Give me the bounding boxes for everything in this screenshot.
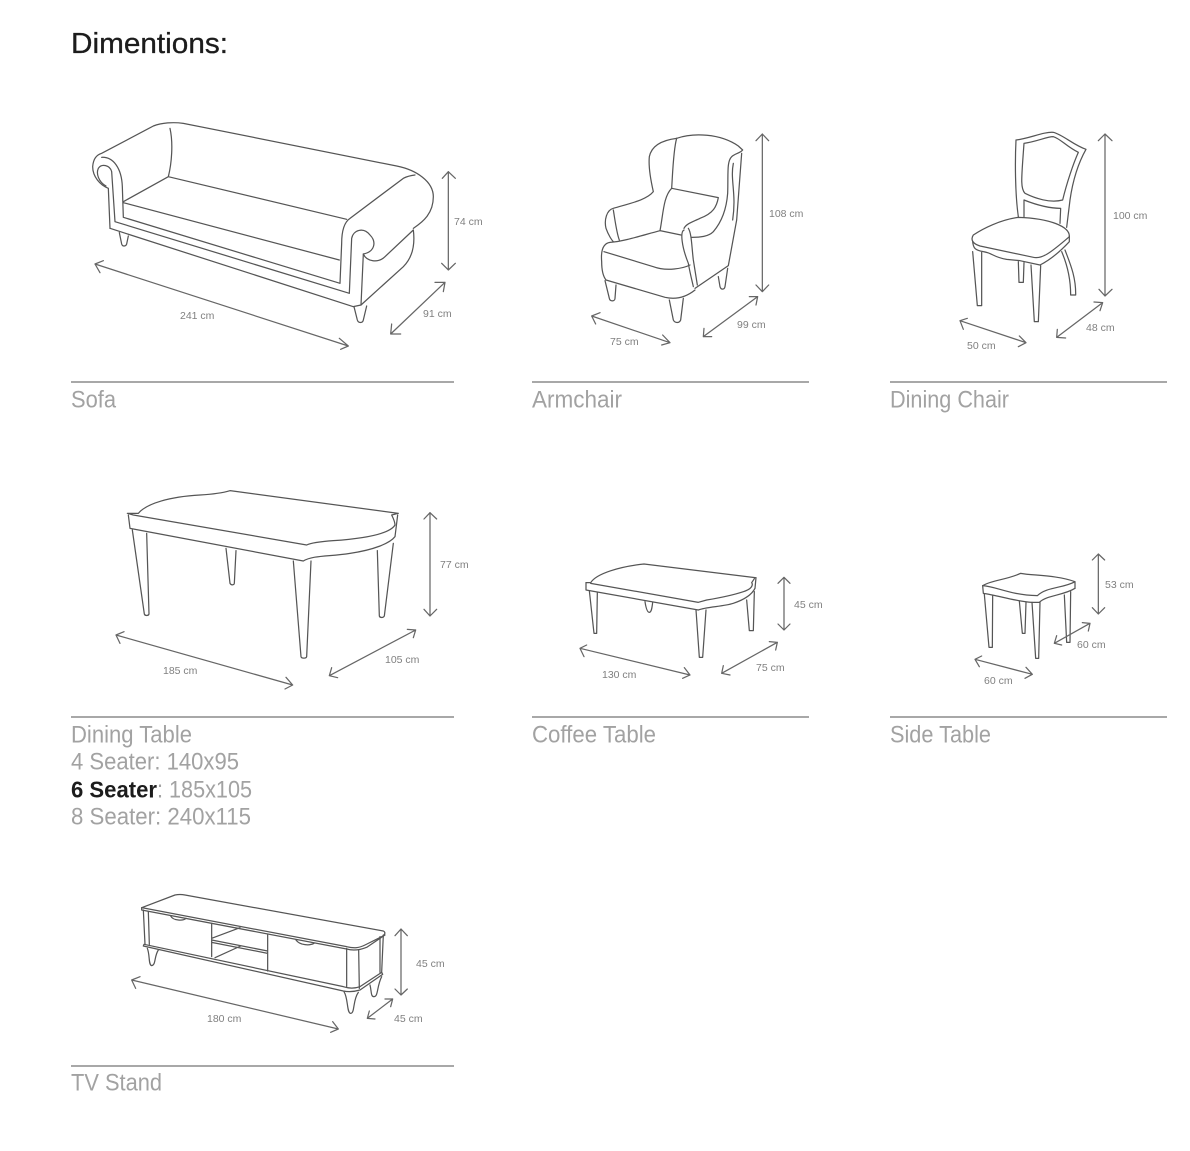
panel: sofa	[71, 123, 483, 413]
label: Dining Table sizes: Dining Table	[71, 722, 192, 748]
arrow: chair depth	[1057, 302, 1103, 338]
label: 99 cm: 99 cm	[737, 319, 766, 331]
icon: armchair drawing	[601, 135, 743, 322]
arrow: armchair width	[592, 313, 670, 345]
icon: tv stand drawing	[142, 894, 385, 1013]
label: Dining Table sizes: 8 Seater: 240x115	[71, 804, 251, 830]
arrow: table height	[424, 513, 437, 616]
arrow: sofa width	[95, 261, 348, 349]
panel: dining chair	[890, 132, 1167, 414]
label: Dining Table sizes: 6 Seater	[71, 776, 157, 802]
label: 45 cm: 45 cm	[416, 958, 445, 970]
arrow: coffee table height	[778, 577, 790, 630]
arrow: tv stand length	[132, 977, 338, 1032]
panel: side table	[890, 554, 1167, 748]
label: 45 cm: 45 cm	[794, 599, 823, 611]
arrow: chair height	[1098, 134, 1112, 296]
icon: dining chair drawing	[972, 132, 1086, 322]
arrow: side table depth	[1054, 623, 1090, 645]
label: Dining Table sizes: : 185x105	[157, 776, 252, 804]
label: 50 cm: 50 cm	[967, 340, 996, 352]
arrow: tv stand depth	[367, 999, 393, 1019]
panel: dining table	[71, 491, 469, 830]
label: Armchair: Armchair	[532, 386, 622, 414]
label: 91 cm: 91 cm	[423, 308, 452, 320]
arrow: coffee table length	[580, 645, 690, 678]
arrow: table width	[329, 629, 416, 678]
label: 130 cm: 130 cm	[602, 669, 637, 681]
arrow: armchair depth	[703, 297, 758, 337]
label: Coffee Table: Coffee Table	[532, 722, 656, 748]
label: 45 cm: 45 cm	[394, 1013, 423, 1025]
label: 60 cm: 60 cm	[1077, 639, 1106, 651]
arrow: side table height	[1092, 554, 1105, 614]
panel: tv stand	[71, 894, 454, 1096]
label: 180 cm: 180 cm	[207, 1013, 242, 1025]
label: 75 cm: 75 cm	[610, 336, 639, 348]
arrow: tv stand height	[395, 929, 407, 995]
panel: armchair	[532, 134, 809, 413]
icon: dining table drawing	[127, 491, 398, 658]
label: Dining Table sizes: 4 Seater: 140x95	[71, 748, 239, 776]
label: 77 cm: 77 cm	[440, 559, 469, 571]
label: 100 cm: 100 cm	[1113, 210, 1148, 222]
label: 105 cm: 105 cm	[385, 654, 420, 666]
label: 74 cm: 74 cm	[454, 216, 483, 228]
label: Sofa: Sofa	[71, 386, 117, 414]
label: 48 cm: 48 cm	[1086, 322, 1115, 334]
label: 60 cm: 60 cm	[984, 675, 1013, 687]
label: 108 cm: 108 cm	[769, 208, 804, 220]
icon: side table drawing	[983, 573, 1075, 658]
label: 53 cm: 53 cm	[1105, 579, 1134, 591]
arrow: table length	[116, 632, 293, 689]
label: 185 cm: 185 cm	[163, 665, 198, 677]
arrow: side table width	[975, 656, 1032, 678]
icon: sofa drawing	[93, 123, 433, 322]
label: Dining Chair: Dining Chair	[890, 386, 1009, 414]
arrow: sofa height	[442, 172, 455, 270]
icon: coffee table drawing	[586, 564, 756, 657]
panel: coffee table	[532, 564, 823, 748]
title: Dimentions:	[71, 28, 228, 60]
label: 75 cm: 75 cm	[756, 662, 785, 674]
arrow: armchair height	[756, 134, 769, 292]
arrow: coffee table width	[722, 642, 777, 675]
label: 241 cm: 241 cm	[180, 310, 215, 322]
label: Side Table: Side Table	[890, 722, 991, 748]
label: TV Stand: TV Stand	[71, 1070, 162, 1096]
arrow: chair width	[960, 318, 1026, 347]
arrow: sofa depth	[391, 282, 445, 334]
label: Dining Table sizes	[71, 722, 252, 830]
